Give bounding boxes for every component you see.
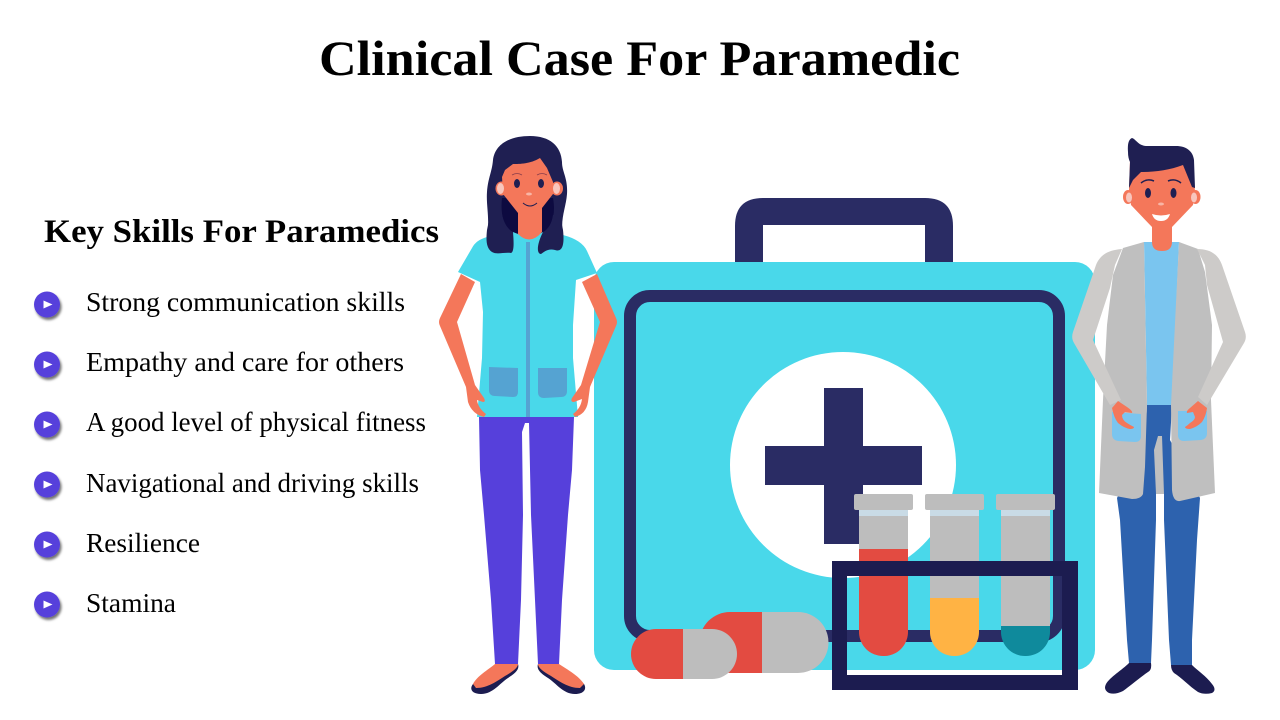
figure: male doctor (1072, 138, 1246, 694)
shirt (1144, 242, 1179, 405)
eyes, brows and smile (1141, 180, 1181, 221)
icon: test tubes in rack (832, 494, 1078, 690)
skill: stamina: Stamina (86, 588, 176, 618)
skill: stamina (34, 588, 176, 618)
inner hair shadow (502, 198, 554, 233)
hair (487, 136, 567, 236)
arms (439, 274, 617, 417)
skill: empathy: Empathy and care for others (86, 347, 404, 377)
ears (496, 182, 563, 196)
skill: communication: Strong communication skills (86, 287, 405, 317)
hair front locks (487, 215, 564, 254)
pockets (1112, 411, 1207, 442)
heading: key skills: Key Skills For Paramedics (44, 214, 439, 250)
icon: small capsule (631, 629, 737, 679)
red test tube (854, 494, 913, 656)
neck (1152, 220, 1172, 251)
trousers (1117, 405, 1200, 665)
skill: fitness: A good level of physical fitness (86, 407, 426, 437)
head (1129, 160, 1195, 227)
lab coat (1099, 242, 1215, 501)
title: Clinical Case For Paramedic (319, 30, 960, 86)
right shoe (538, 664, 585, 694)
pants (479, 417, 574, 664)
eyes and mouth (512, 174, 547, 206)
teal test tube (996, 494, 1055, 656)
hands (1112, 401, 1207, 429)
skill: navigation: Navigational and driving skills (86, 468, 419, 498)
zipper (526, 242, 530, 417)
orange test tube (925, 494, 984, 656)
ears (1123, 190, 1200, 204)
icon: first aid case (594, 198, 1095, 670)
sleeves (1072, 249, 1246, 405)
shoes (1105, 663, 1214, 694)
neck and face (502, 158, 553, 240)
shirt (458, 232, 597, 417)
skill: resilience (34, 528, 200, 558)
hair (1128, 138, 1195, 188)
pockets (489, 367, 567, 398)
icon: large capsule (700, 612, 828, 673)
figure: woman paramedic (439, 136, 617, 694)
panel: key skills (34, 214, 439, 618)
skill: resilience: Resilience (86, 528, 200, 558)
left shoe (471, 664, 518, 694)
rack (832, 561, 1078, 690)
